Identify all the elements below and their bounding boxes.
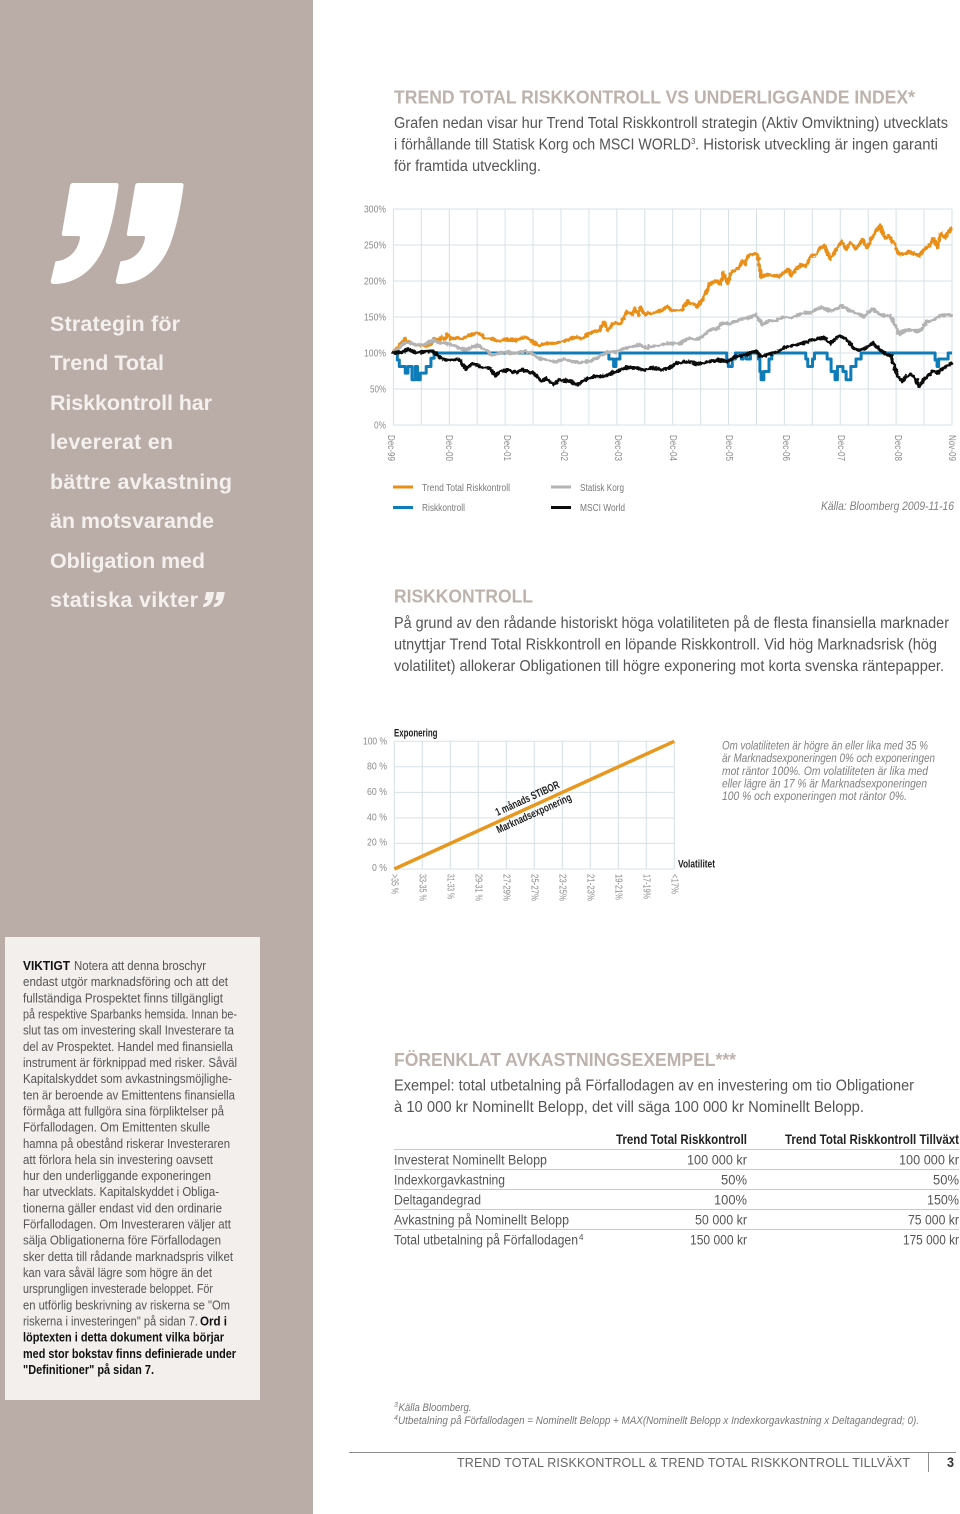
- text block: example intro: Exempel: total utbetalning på Förfallodagen av en investering om tio Obligationer: [394, 1078, 914, 1094]
- pull quote text: levererat en: [50, 430, 173, 454]
- icon: small closing quotation mark: [203, 592, 225, 607]
- volatility x-axis labels: 27-29%: [500, 874, 512, 901]
- notice body text: Förfallodagen. Om Investeraren väljer att: [23, 1218, 231, 1232]
- notice body text: sälja Obligationerna före Förfallodagen: [23, 1234, 221, 1248]
- chart y-axis labels: 100%: [364, 348, 386, 360]
- notice body text: VIKTIGT: [23, 959, 70, 973]
- notice body text: slut tas om investering skall Investerare ta: [23, 1024, 234, 1038]
- pull quote text: bättre avkastning: [50, 470, 232, 494]
- table column 1 values: 50%: [721, 1172, 747, 1188]
- chart x-axis labels: Dec-00: [443, 435, 455, 461]
- series: Statisk Korg: [393, 306, 951, 363]
- notice body text: riskerna i investeringen" på sidan 7.: [23, 1314, 198, 1328]
- table column 1 values: [687, 1152, 747, 1248]
- notice body text: Notera att denna broschyr: [74, 959, 206, 973]
- footnotes: Källa Bloomberg.: [398, 1402, 472, 1414]
- chart x-axis labels: Dec-01: [501, 435, 513, 461]
- table column 1 values: 100 000 kr: [687, 1152, 747, 1168]
- table column 1 values: 100%: [714, 1192, 747, 1208]
- chart x-axis labels: Nov-09: [946, 435, 958, 461]
- chart legend: [393, 483, 625, 514]
- footer: page title and number: [349, 1452, 956, 1472]
- notice body text: sker detta till rådande marknadspris vilket: [23, 1250, 233, 1264]
- chart legend: MSCI World: [580, 503, 625, 514]
- text block: chart intro: [394, 115, 948, 175]
- line label: Marknadsexponering: Marknadsexponering: [495, 792, 573, 836]
- table column 1 values: 150 000 kr: [690, 1232, 747, 1248]
- line chart: performance 1999-2009: [364, 204, 958, 461]
- chart x-axis labels: Dec-02: [558, 435, 570, 461]
- text block: chart intro: för framtida utveckling.: [394, 158, 541, 175]
- text block: example intro: à 10 000 kr Nominellt Belopp, det vill säga 100 000 kr Nominellt Belopp.: [394, 1099, 864, 1116]
- table: return example: [394, 1132, 959, 1248]
- series: Trend Total Riskkontroll: [393, 226, 951, 352]
- footer: page title and number: 3: [947, 1455, 954, 1470]
- pull quote text: Riskkontroll har: [50, 391, 213, 415]
- pull quote text: Obligation med: [50, 549, 205, 573]
- table column 2 values: [899, 1152, 959, 1248]
- text block: Riskkontroll description: [394, 615, 949, 675]
- text block: volatility explanation: 100 % och exponeringen mot räntor 0%.: [722, 789, 907, 803]
- table column 2 values: 50%: [933, 1172, 959, 1188]
- notice body text: del av Prospektet. Handel med finansiella: [23, 1040, 233, 1054]
- notice body text: hur den underliggande exponeringen: [23, 1169, 211, 1183]
- text block: chart intro: . Historisk utveckling är ingen garanti: [695, 136, 938, 154]
- series: Riskkontroll: [393, 353, 952, 380]
- exposure y-axis labels: 20 %: [367, 836, 387, 848]
- volatility x-axis labels: >35 %: [388, 874, 400, 894]
- text block: chart intro: i förhållande till Statisk Korg och MSCI WORLD: [394, 136, 691, 154]
- pull quote text: [50, 312, 232, 612]
- text block: volatility explanation: eller lägre än 17 % är Marknadsexponeringen: [722, 776, 927, 790]
- table row labels: [394, 1152, 584, 1248]
- notice body text: Kapitalskyddet som avkastningsmöjlighe-: [23, 1072, 232, 1086]
- footer: page title and number: TREND TOTAL RISKKONTROLL & TREND TOTAL RISKKONTROLL TILLVÄXT: [457, 1456, 910, 1470]
- text block: volatility explanation: [722, 738, 935, 803]
- chart y-axis labels: 200%: [364, 276, 386, 288]
- chart x-axis labels: Dec-04: [667, 435, 679, 461]
- pull quote text: Trend Total: [50, 351, 164, 375]
- table header: [616, 1132, 959, 1147]
- axis title: Exponering: Exponering: [394, 728, 438, 740]
- icon: large quotation mark: [51, 183, 184, 284]
- notice body text: tionerna gäller endast vid den ordinarie: [23, 1201, 222, 1215]
- chart y-axis labels: 50%: [370, 384, 386, 396]
- notice body text: en utförlig beskrivning av riskerna se "Om: [23, 1298, 230, 1312]
- notice body text: Ord i: [200, 1314, 227, 1328]
- table column 1 values: 50 000 kr: [695, 1212, 747, 1228]
- notice body text: Förfallodagen. Om Emittenten skulle: [23, 1121, 210, 1135]
- chart x-axis labels: [385, 435, 958, 461]
- series: MSCI World: [393, 336, 952, 386]
- volatility x-axis labels: 21-23%: [584, 874, 596, 901]
- table row labels: 4: [579, 1233, 584, 1242]
- footnotes: [394, 1402, 919, 1427]
- chart x-axis labels: Dec-05: [723, 435, 735, 461]
- chart x-axis labels: Dec-99: [385, 435, 397, 461]
- volatility x-axis labels: 33-35 %: [416, 874, 428, 901]
- table row labels: Avkastning på Nominellt Belopp: [394, 1212, 569, 1228]
- notice body text: kan vara såväl lägre som högre än det: [23, 1266, 212, 1280]
- chart x-axis labels: Dec-03: [612, 435, 624, 461]
- volatility x-axis labels: 23-25%: [556, 874, 568, 901]
- exposure y-axis labels: 0 %: [372, 862, 387, 874]
- text block: chart intro: 3: [691, 137, 696, 146]
- notice body text: ten är beroende av Emittentens finansiella: [23, 1088, 235, 1102]
- exposure y-axis labels: 40 %: [367, 812, 387, 824]
- pull quote text: statiska vikter: [50, 588, 199, 612]
- chart x-axis labels: Dec-08: [892, 435, 904, 461]
- pull quote text: Strategin för: [50, 312, 181, 336]
- pull quote text: än motsvarande: [50, 509, 214, 533]
- chart data series: [393, 226, 952, 386]
- heading: Förenklat avkastningsexempel: FÖRENKLAT AVKASTNINGSEXEMPEL***: [394, 1050, 736, 1070]
- chart y-axis labels: 300%: [364, 204, 386, 216]
- axis title: Volatilitet: Volatilitet: [678, 858, 715, 870]
- chart legend: Riskkontroll: [422, 503, 465, 514]
- exposure y-axis labels: 80 %: [367, 760, 387, 772]
- chart x-axis labels: Dec-06: [780, 435, 792, 461]
- notice body text: förmåga att fullgöra sina förpliktelser på: [23, 1104, 224, 1118]
- heading: Trend Total Riskkontroll vs underliggande index: TREND TOTAL RISKKONTROLL VS UNDERLIGGANDE INDEX*: [394, 88, 915, 108]
- volatility x-axis labels: [388, 874, 680, 901]
- table row labels: Total utbetalning på Förfallodagen: [394, 1232, 578, 1248]
- notice body text: ursprungligen investerade beloppet. För: [23, 1282, 213, 1296]
- footnotes: 4: [394, 1415, 398, 1422]
- exposure y-axis labels: [363, 736, 387, 874]
- table row labels: Investerat Nominellt Belopp: [394, 1152, 547, 1168]
- exposure y-axis labels: 60 %: [367, 786, 387, 798]
- notice body text: att förlora hela sin investering oavsett: [23, 1153, 213, 1167]
- volatility x-axis labels: 19-21%: [612, 874, 624, 900]
- line label: 1 månads STIBOR: 1 månads STIBOR: [494, 779, 562, 819]
- table row labels: Indexkorgavkastning: [394, 1172, 505, 1188]
- chart x-axis labels: Dec-07: [835, 435, 847, 461]
- notice body text: fullständiga Prospektet finns tillgängligt: [23, 991, 223, 1005]
- table header: Trend Total Riskkontroll: [616, 1132, 747, 1147]
- notice body text: på respektive Sparbanks hemsida. Innan be-: [23, 1008, 237, 1022]
- notice body text: med stor bokstav finns definierade under: [23, 1347, 236, 1361]
- notice body text: endast utgör marknadsföring och att det: [23, 975, 228, 989]
- orange exposure line: [394, 741, 674, 869]
- chart legend: Statisk Korg: [580, 483, 624, 494]
- line chart: exposure vs volatility: [363, 728, 715, 901]
- notice body text: har utvecklats. Kapitalskyddet i Obliga-: [23, 1185, 219, 1199]
- chart y-axis labels: 250%: [364, 240, 386, 252]
- panel: left sidebar background: [0, 0, 313, 1514]
- notice body text: löptexten i detta dokument vilka börjar: [23, 1331, 224, 1345]
- footnotes: 3: [394, 1402, 398, 1409]
- volatility x-axis labels: 17-19%: [640, 874, 652, 899]
- notice body text: "Definitioner" på sidan 7.: [23, 1363, 154, 1377]
- chart legend: Trend Total Riskkontroll: [422, 483, 510, 494]
- panel: important notice: [5, 937, 260, 1400]
- notice body text: hamna på obestånd riskerar Investeraren: [23, 1137, 230, 1151]
- text block: Riskkontroll description: utnyttjar Trend Total Riskkontroll en löpande Riskkontroll. Vid hög Marknadsrisk (hög: [394, 636, 937, 654]
- volatility x-axis labels: <17%: [668, 874, 680, 894]
- heading: Riskkontroll: RISKKONTROLL: [394, 586, 533, 606]
- notice body text: [23, 959, 237, 1377]
- exposure y-axis labels: 100 %: [363, 736, 387, 748]
- volatility x-axis labels: 25-27%: [528, 874, 540, 901]
- notice body text: instrument är förknippad med risker. Såväl: [23, 1056, 237, 1070]
- table row labels: Deltagandegrad: [394, 1192, 481, 1208]
- chart y-axis labels: [364, 204, 386, 432]
- volatility x-axis labels: 29-31 %: [472, 874, 484, 901]
- chart y-axis labels: 150%: [364, 312, 386, 324]
- volatility x-axis labels: 31-33 %: [444, 874, 456, 899]
- text block: volatility explanation: mot räntor 100%. Om volatiliteten är lika med: [722, 764, 928, 778]
- text block: example intro: [394, 1078, 914, 1116]
- chart y-axis labels: 0%: [374, 420, 386, 432]
